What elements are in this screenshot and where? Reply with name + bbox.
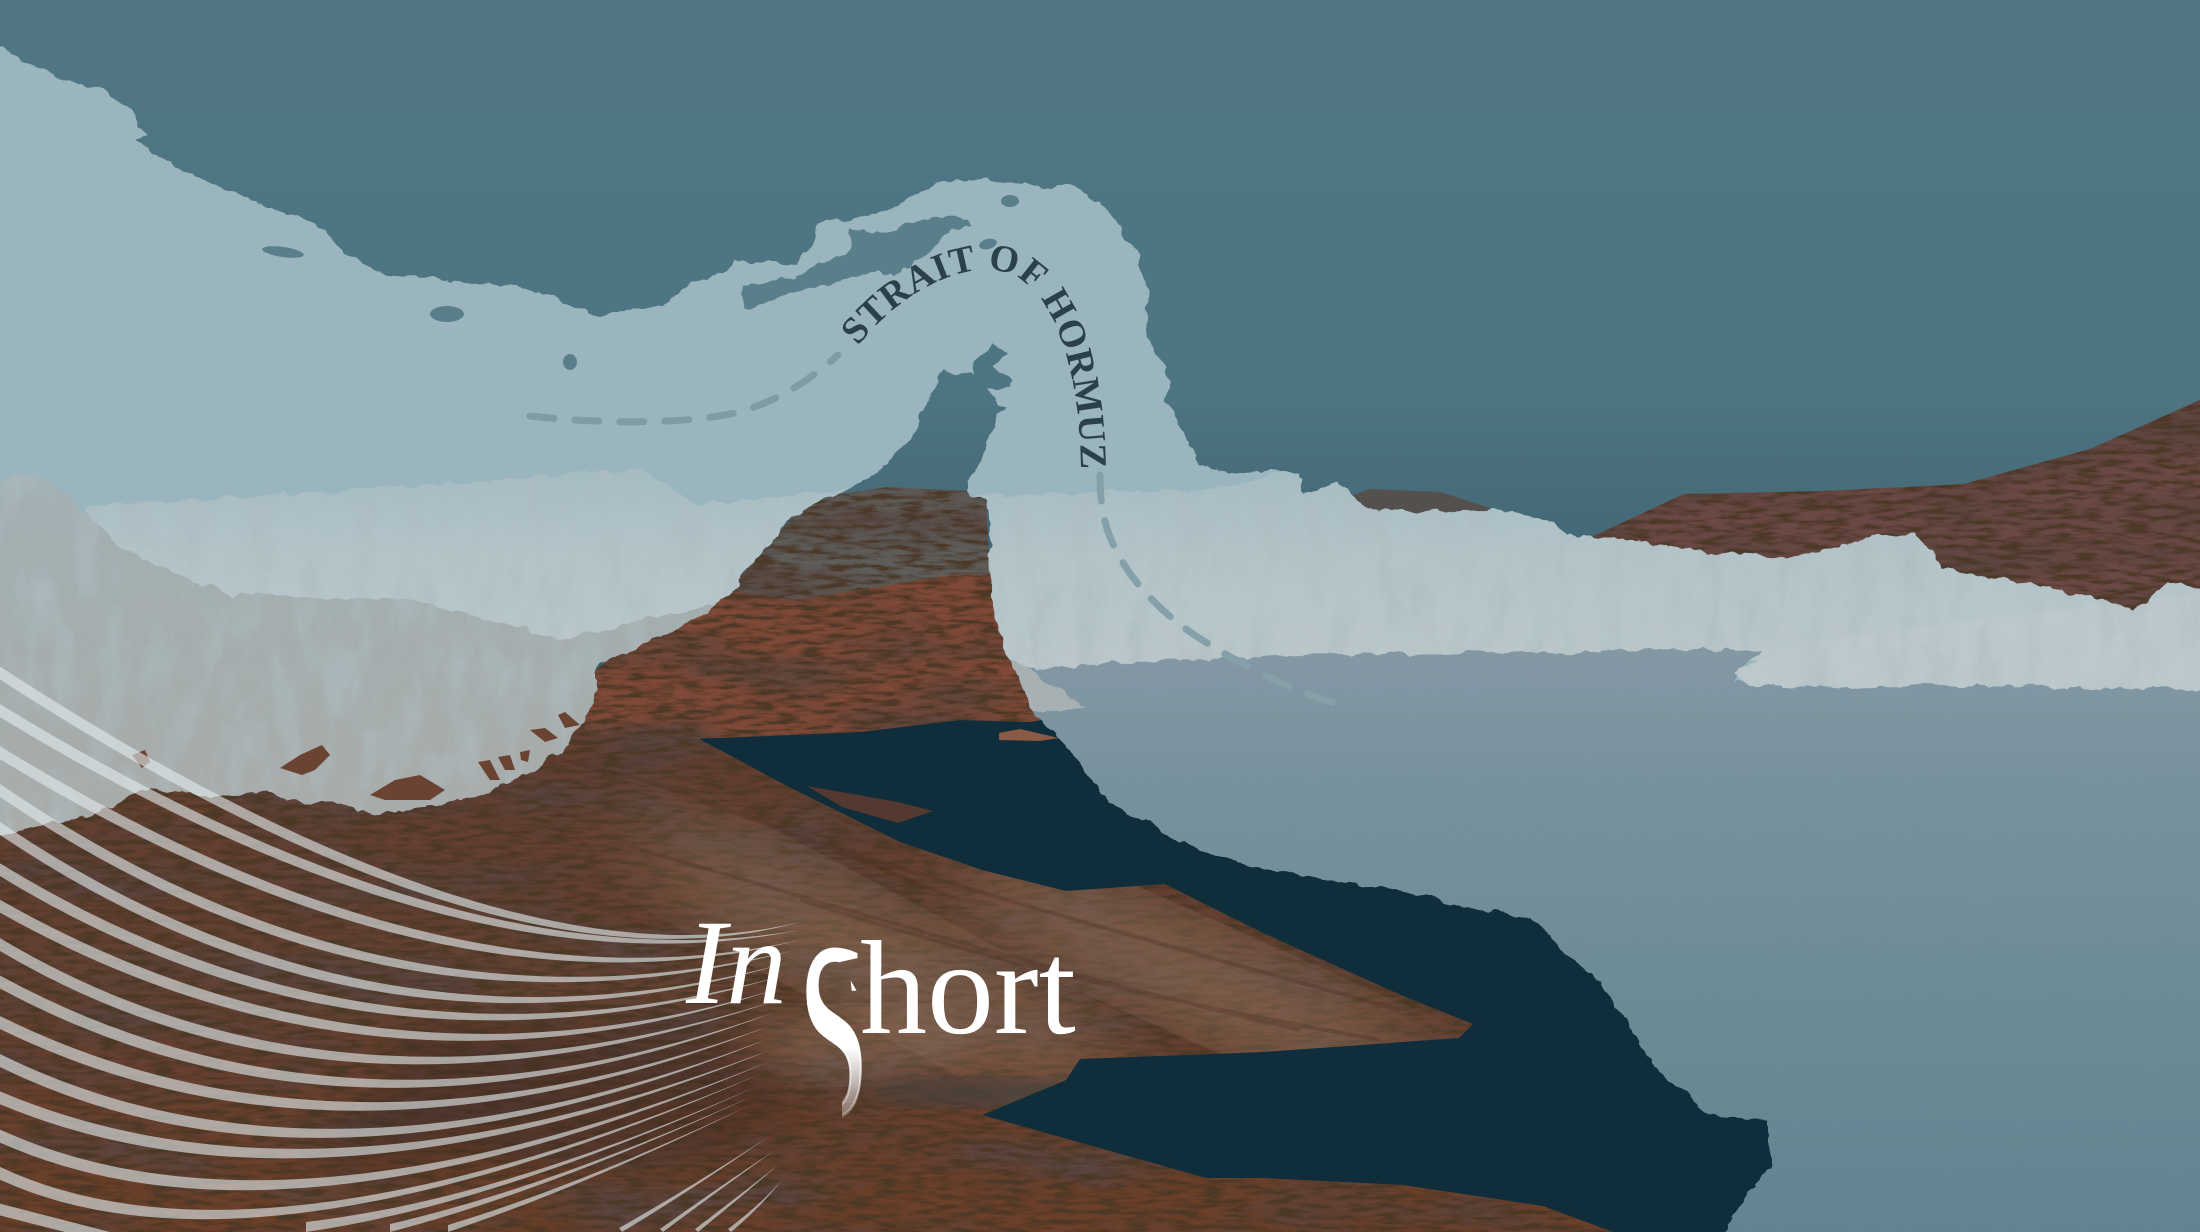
island dots xyxy=(262,195,1019,370)
islet and spit xyxy=(807,729,1059,823)
inner sea: dark water xyxy=(700,700,1800,1232)
logo word: In: In xyxy=(685,896,787,1030)
shipping lane: dashed route south-east xyxy=(1100,475,1346,706)
label: Strait of Hormuz: STRAIT OF HORMUZ xyxy=(842,245,1106,468)
logo swash letter: S: S xyxy=(799,892,869,1169)
open sea xyxy=(1000,650,2200,1232)
pale right peninsula xyxy=(1734,598,2150,689)
decorative tapered arcs xyxy=(0,660,800,1232)
logo: In Short xyxy=(686,924,1076,1118)
pale left mountain xyxy=(0,474,715,836)
shipping lane: dashed route west xyxy=(530,355,838,422)
Qeshm island xyxy=(742,215,970,310)
logo word: hort: hort xyxy=(860,914,1076,1062)
brown islands on the southern shore xyxy=(132,712,580,800)
background: sky xyxy=(0,0,2200,700)
pale far mountains xyxy=(86,467,2200,692)
pale cape xyxy=(1009,659,1086,712)
islands in the gulf xyxy=(262,195,1019,370)
foreground terrain xyxy=(0,690,1613,1232)
upper peninsula: grey summit and red cliffs xyxy=(560,487,1085,740)
distant brown mountains, right xyxy=(1340,400,2200,700)
